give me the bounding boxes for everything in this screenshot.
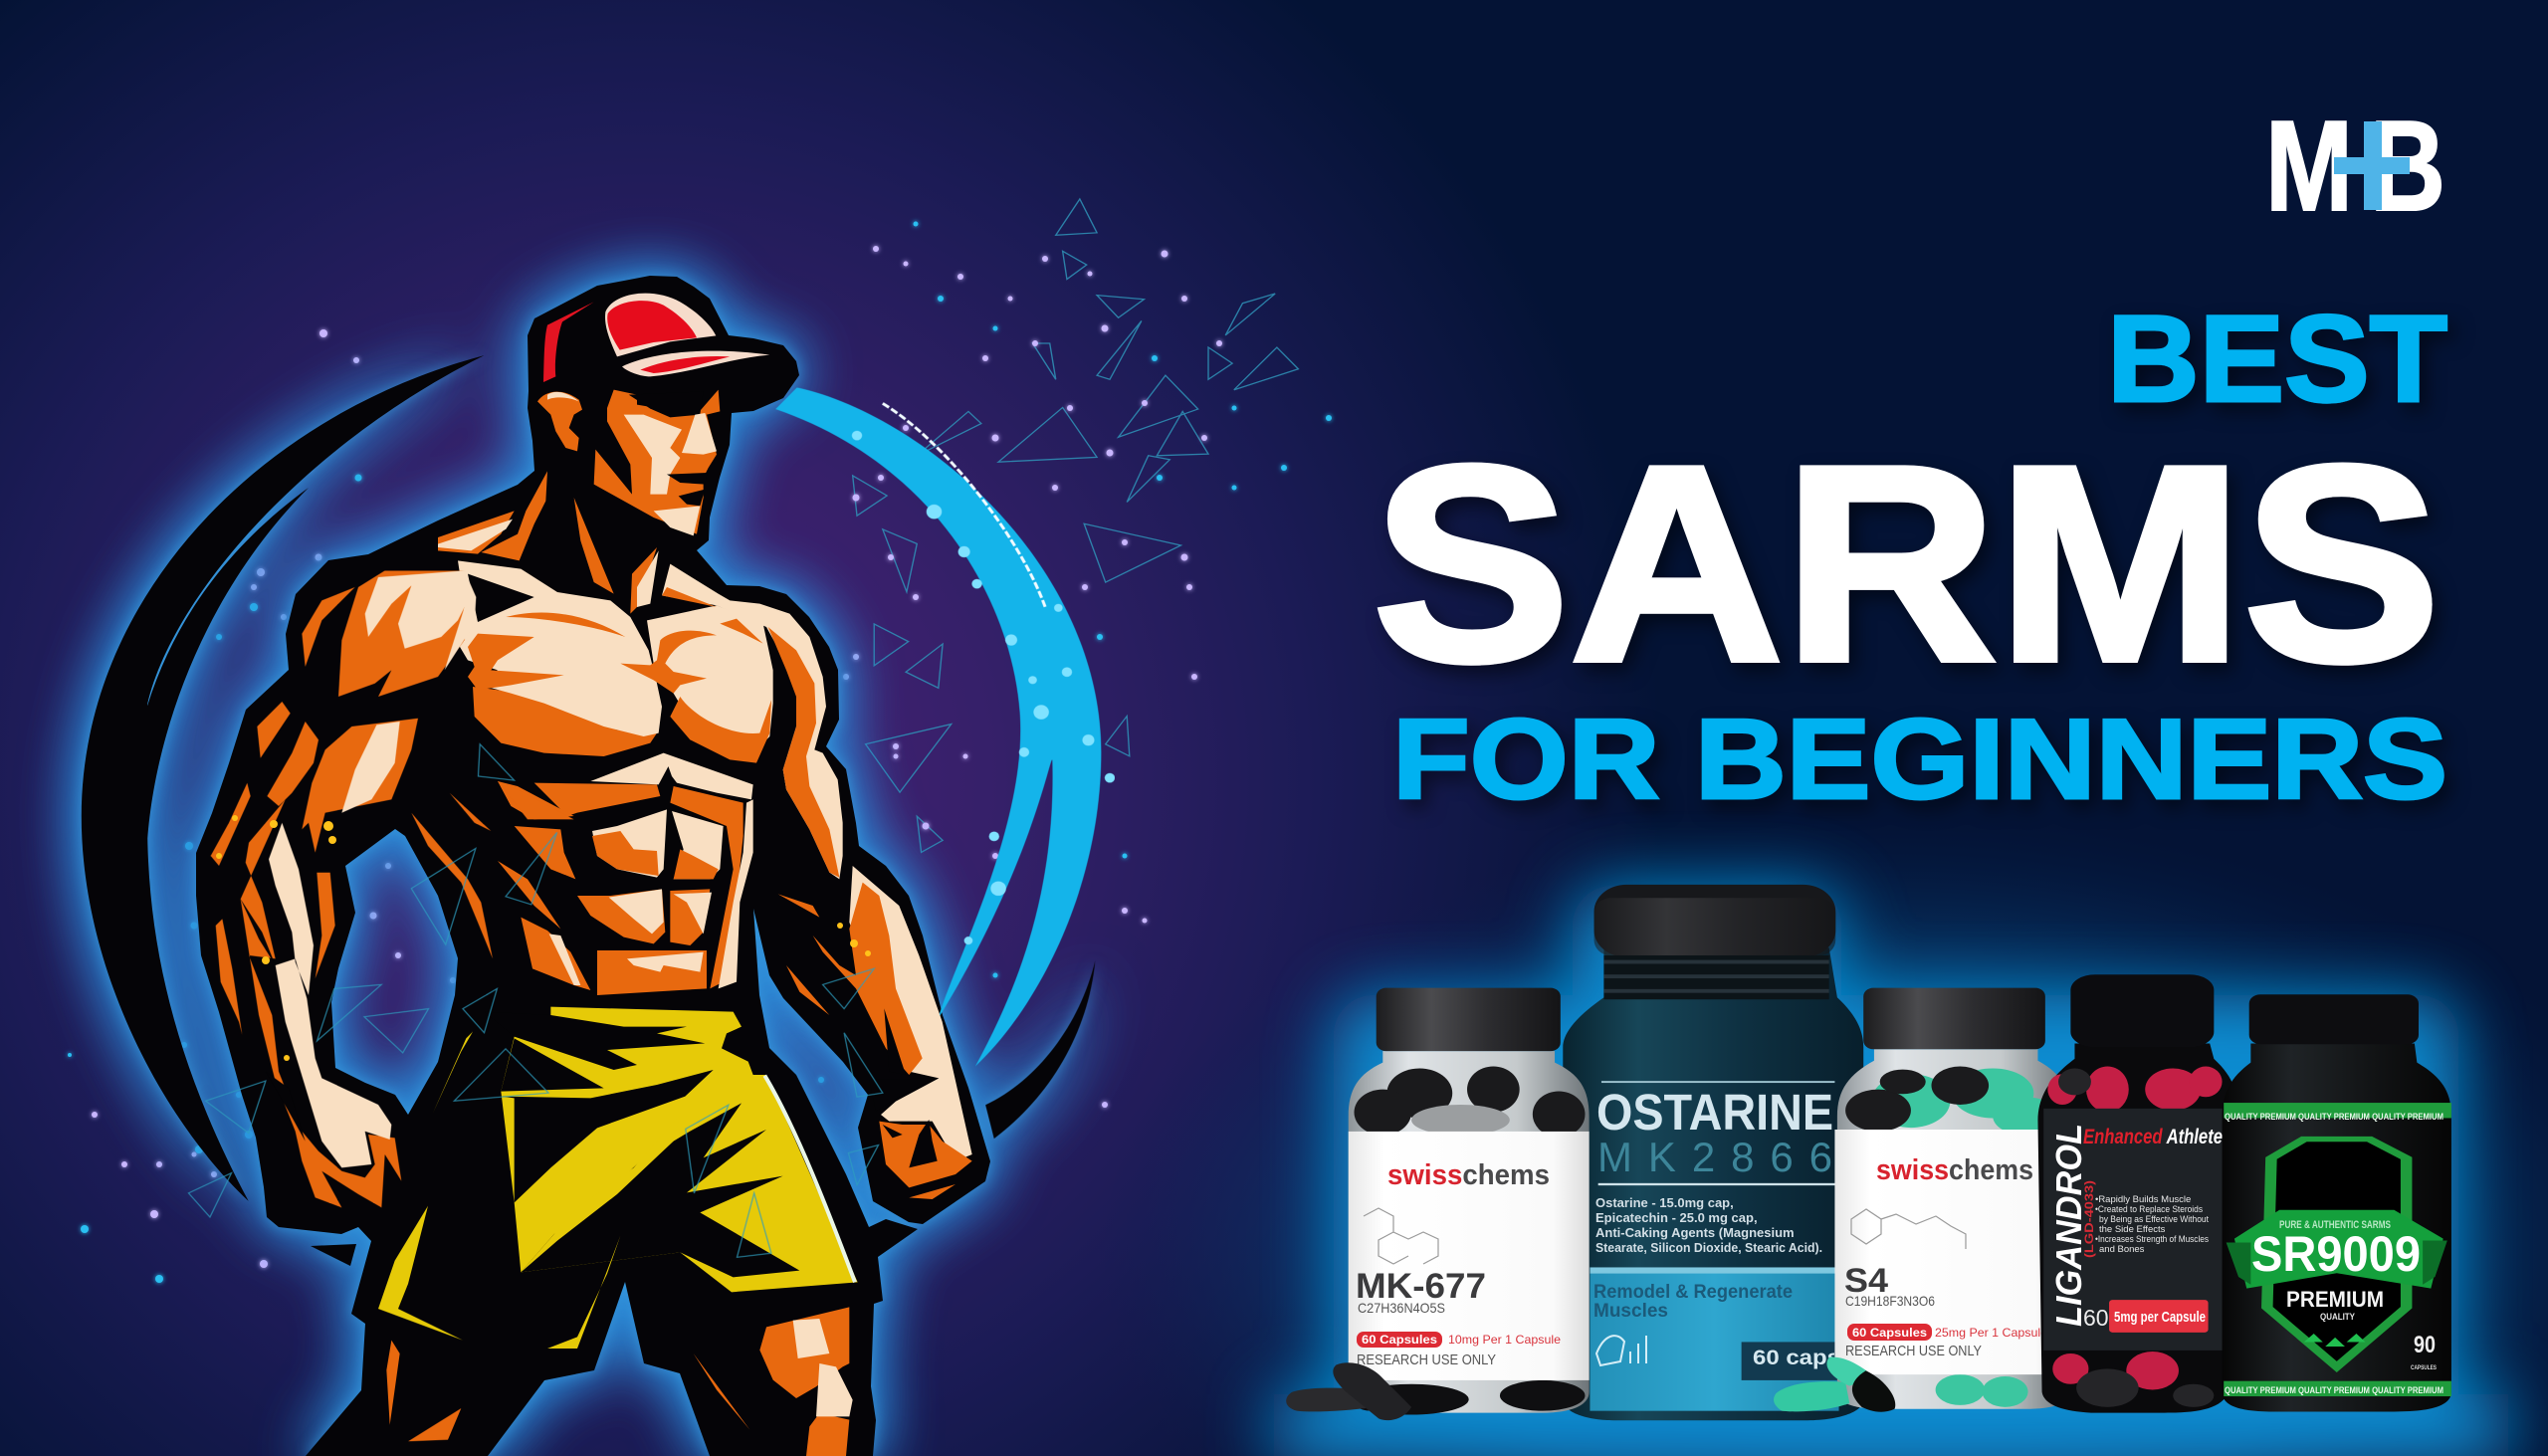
left arm [211,570,574,1207]
title: BEST: BEST [2107,291,2447,428]
bottle: Ligandrol [2037,974,2238,1413]
loose capsules: teal and black [1774,1357,1895,1412]
upper arm [211,702,418,866]
bottle: SR9009: CAPSULES [2411,1364,2437,1371]
right knee [694,1307,849,1456]
particle triangles behind figure [853,199,1298,852]
bottle: S4: 60 Capsules [1852,1326,1927,1340]
glow behind bottles [1274,886,2508,1456]
right pec [647,605,773,749]
bottle: SR9009: PURE & AUTHENTIC SARMS [2279,1219,2391,1231]
bottle: MK-677: 60 Capsules [1362,1333,1437,1347]
overlay triangles on figure [188,744,883,1257]
loose capsules: black [1286,1362,1411,1420]
bottle: Ostarine MK-2866 [1563,885,1863,1420]
cap dome [605,294,716,356]
head and face details [438,294,769,614]
shorts black folds [485,1012,799,1277]
deltoid [338,570,471,697]
forearm [849,866,972,1161]
small black wedge [311,1244,356,1266]
figure with glow [82,276,1095,1456]
man silhouette [196,276,990,1456]
obliques [498,781,590,990]
trapezius [438,471,547,560]
left pec orange marks [468,612,625,690]
shorts lower band [521,1115,680,1349]
bottle: Ligandrol: the Side Effects [2099,1224,2166,1235]
forearm main [216,799,401,1207]
cap side stripe [543,302,594,382]
title: FOR BEGINNERS: FOR BEGINNERS [1392,697,2447,823]
bottle: Ostarine MK-2866: Ostarine - 15.0mg cap, [1595,1195,1734,1210]
black arc right [985,960,1095,1139]
outer shoulder streak [302,587,355,667]
bottle: MK-677: 10mg Per 1 Capsule [1448,1333,1561,1347]
bottle: SR9009: QUALITY PREMIUM QUALITY PREMIUM QUALITY PREMIUM [2225,1385,2443,1395]
shorts side trim [764,1076,855,1282]
right shoulder [662,564,843,879]
bottle: Ligandrol: (LGD-4033) [2082,1180,2096,1258]
bottle: MK-677: RESEARCH USE ONLY [1357,1352,1496,1368]
abs row 1 [592,809,724,879]
bicep highlight [341,722,400,813]
mouth [667,473,708,506]
bottle: MK-677: MK-677 [1356,1267,1486,1306]
left pec [458,560,662,736]
right arm, fist and right leg [694,866,972,1456]
bottle: SR9009: SR9009 [2251,1226,2421,1282]
logo M+B [2265,95,2445,238]
side fleck [778,894,819,918]
abs row 3 [597,950,707,995]
ear [537,392,582,451]
bottle: S4: RESEARCH USE ONLY [1845,1343,1982,1359]
torso and chest [458,560,843,995]
fist [879,1122,972,1199]
bottle: S4: S4 [1844,1262,1888,1300]
bottle: SR9009: QUALITY PREMIUM QUALITY PREMIUM QUALITY PREMIUM [2225,1112,2443,1122]
bottle: Ligandrol: Enhanced Athlete [2083,1126,2223,1148]
logo M+B: M [2265,95,2353,238]
bottle: Ostarine MK-2866: Anti-Caking Agents (Magnesium [1595,1225,1795,1240]
arm sparkles [216,815,871,1061]
bottle: Ligandrol: •Increases Strength of Muscles [2095,1234,2209,1245]
particle dots [68,221,1332,1283]
right pec orange marks [620,619,771,763]
bottle: Ligandrol: and Bones [2099,1244,2145,1255]
brow shadow [629,391,704,417]
lower obliques flecks [411,781,574,958]
bottle: Ligandrol: LIGANDROL [2048,1124,2089,1327]
yellow shorts [485,1007,858,1349]
bottle: MK-677: swisschems [1387,1159,1550,1191]
bottle: SR9009 [2223,994,2451,1411]
abs row 2 [577,889,710,945]
logo plus [2334,121,2410,210]
logo M+B: B [2370,95,2445,238]
bottle: SR9009: PREMIUM [2286,1287,2384,1312]
bottle: SR9009: QUALITY [2320,1312,2355,1322]
shorts trims and left leg marks [378,1032,473,1441]
bottle: SR9009: 90 [2414,1332,2436,1358]
cap brim stripe [622,351,769,376]
bottle: Ostarine MK-2866: MK2866 [1597,1134,1832,1180]
right shoulder orange strip [662,587,839,878]
bottle: Ligandrol: 5mg per Capsule [2114,1309,2206,1326]
bottle: MK-677: C27H36N4O5S [1358,1300,1445,1316]
face orange [594,390,720,534]
neck strokes [574,498,657,614]
bottle: Ostarine MK-2866: Muscles [1593,1301,1668,1322]
bottle: MK-677 [1349,988,1590,1415]
nose [682,413,717,455]
left pec underlay [473,687,657,756]
cheek [624,415,682,495]
bottle: S4 [1834,988,2070,1409]
armpit black triangle [468,574,534,622]
bottle: Ligandrol: •Created to Replace Steroids [2095,1204,2203,1215]
bottle: Ligandrol: by Being as Effective Without [2099,1214,2209,1225]
bottle: Ostarine MK-2866: Stearate, Silicon Dioxide, Stearic Acid). [1595,1240,1822,1255]
forearm highlight and hand [269,823,391,1167]
black crescent left [82,355,484,1201]
bottle: S4: swisschems [1876,1154,2033,1186]
forearm crease [241,899,306,1142]
bottle: Ostarine MK-2866: Remodel & Regenerate [1593,1282,1793,1303]
bottle: S4: 25mg Per 1 Capsule [1935,1326,2047,1340]
bottle: S4: C19H18F3N3O6 [1845,1293,1935,1309]
cyan energy arc [775,387,1115,1067]
upper abs [534,783,743,988]
title: SARMS: SARMS [1373,409,2441,720]
bottle: Ligandrol: •Rapidly Builds Muscle [2095,1194,2191,1205]
chin [654,506,700,535]
bottle: Ostarine MK-2866: 60 caps [1753,1347,1840,1369]
bottle: Ostarine MK-2866: OSTARINE [1596,1084,1833,1141]
bottle: Ligandrol: 60 [2083,1305,2109,1331]
bottle: Ostarine MK-2866: Epicatechin - 25.0 mg cap, [1595,1210,1758,1225]
